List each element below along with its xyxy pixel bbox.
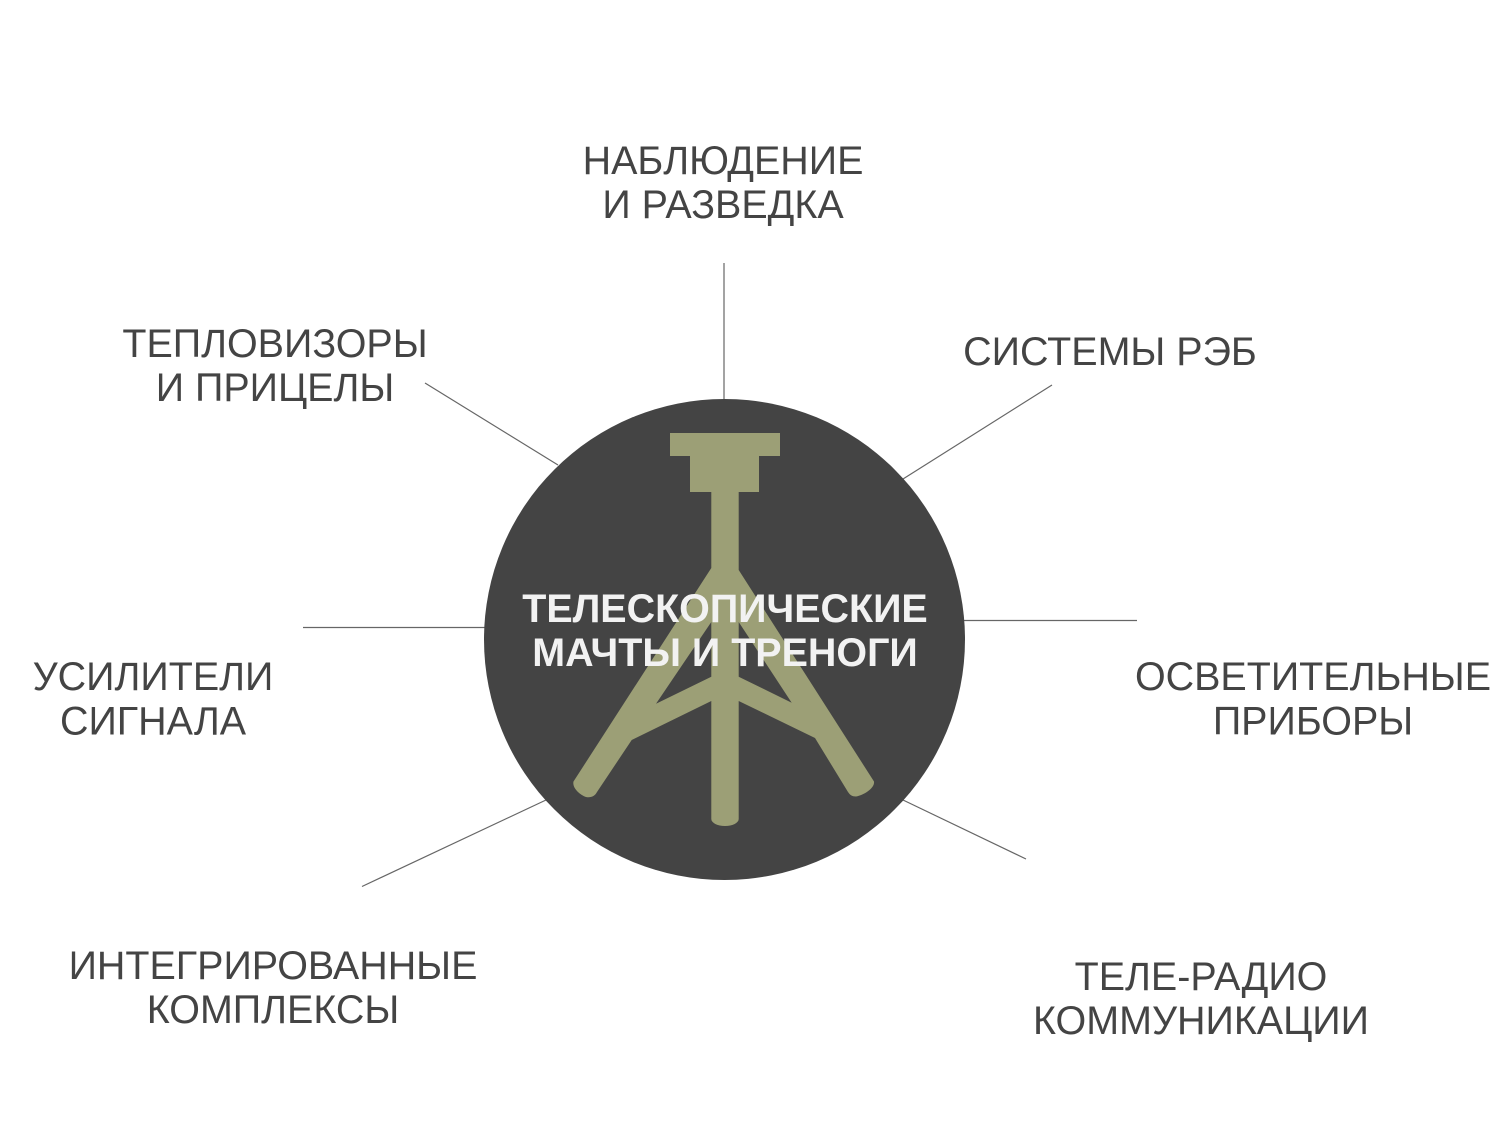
label: thermal imagers and sights: [122, 322, 428, 410]
connector: tele-radio communications: [903, 800, 1026, 859]
connector: amplifiers: [303, 626, 485, 628]
label: tele-radio communications: КОММУНИКАЦИИ: [1033, 999, 1369, 1043]
central circle: [484, 399, 965, 880]
label: lighting devices: ПРИБОРЫ: [1213, 700, 1413, 744]
label: thermal imagers and sights: ТЕПЛОВИЗОРЫ: [122, 322, 428, 366]
label: lighting devices: [1135, 655, 1491, 744]
label: signal amplifiers: УСИЛИТЕЛИ: [33, 655, 273, 699]
label: integrated complexes: КОМПЛЕКСЫ: [147, 988, 399, 1032]
label: tele-radio communications: [1033, 955, 1369, 1043]
central title: ТЕЛЕСКОПИЧЕСКИЕ: [522, 587, 928, 631]
label: observation and reconnaissance: [583, 139, 863, 227]
connector: EW systems: [903, 385, 1052, 479]
central title: [522, 587, 928, 675]
label: EW systems: СИСТЕМЫ РЭБ: [963, 330, 1257, 374]
label: observation and reconnaissance: НАБЛЮДЕНИЕ: [583, 139, 863, 183]
label: thermal imagers and sights: И ПРИЦЕЛЫ: [156, 366, 394, 410]
label: tele-radio communications: ТЕЛЕ-РАДИО: [1075, 955, 1327, 999]
label: integrated complexes: [69, 944, 477, 1032]
connector: lighting: [964, 620, 1137, 622]
connector: thermal imagers: [425, 383, 558, 465]
label: signal amplifiers: СИГНАЛА: [60, 700, 247, 744]
connector: integrated complexes: [362, 800, 546, 886]
icon: telescopic mast tripod: [573, 433, 874, 826]
central title: МАЧТЫ И ТРЕНОГИ: [532, 631, 918, 675]
label: observation and reconnaissance: И РАЗВЕДКА: [602, 183, 844, 227]
label: lighting devices: ОСВЕТИТЕЛЬНЫЕ: [1135, 655, 1491, 699]
connector: observation: [723, 263, 725, 400]
label: signal amplifiers: [33, 655, 273, 744]
label: integrated complexes: ИНТЕГРИРОВАННЫЕ: [69, 944, 477, 988]
